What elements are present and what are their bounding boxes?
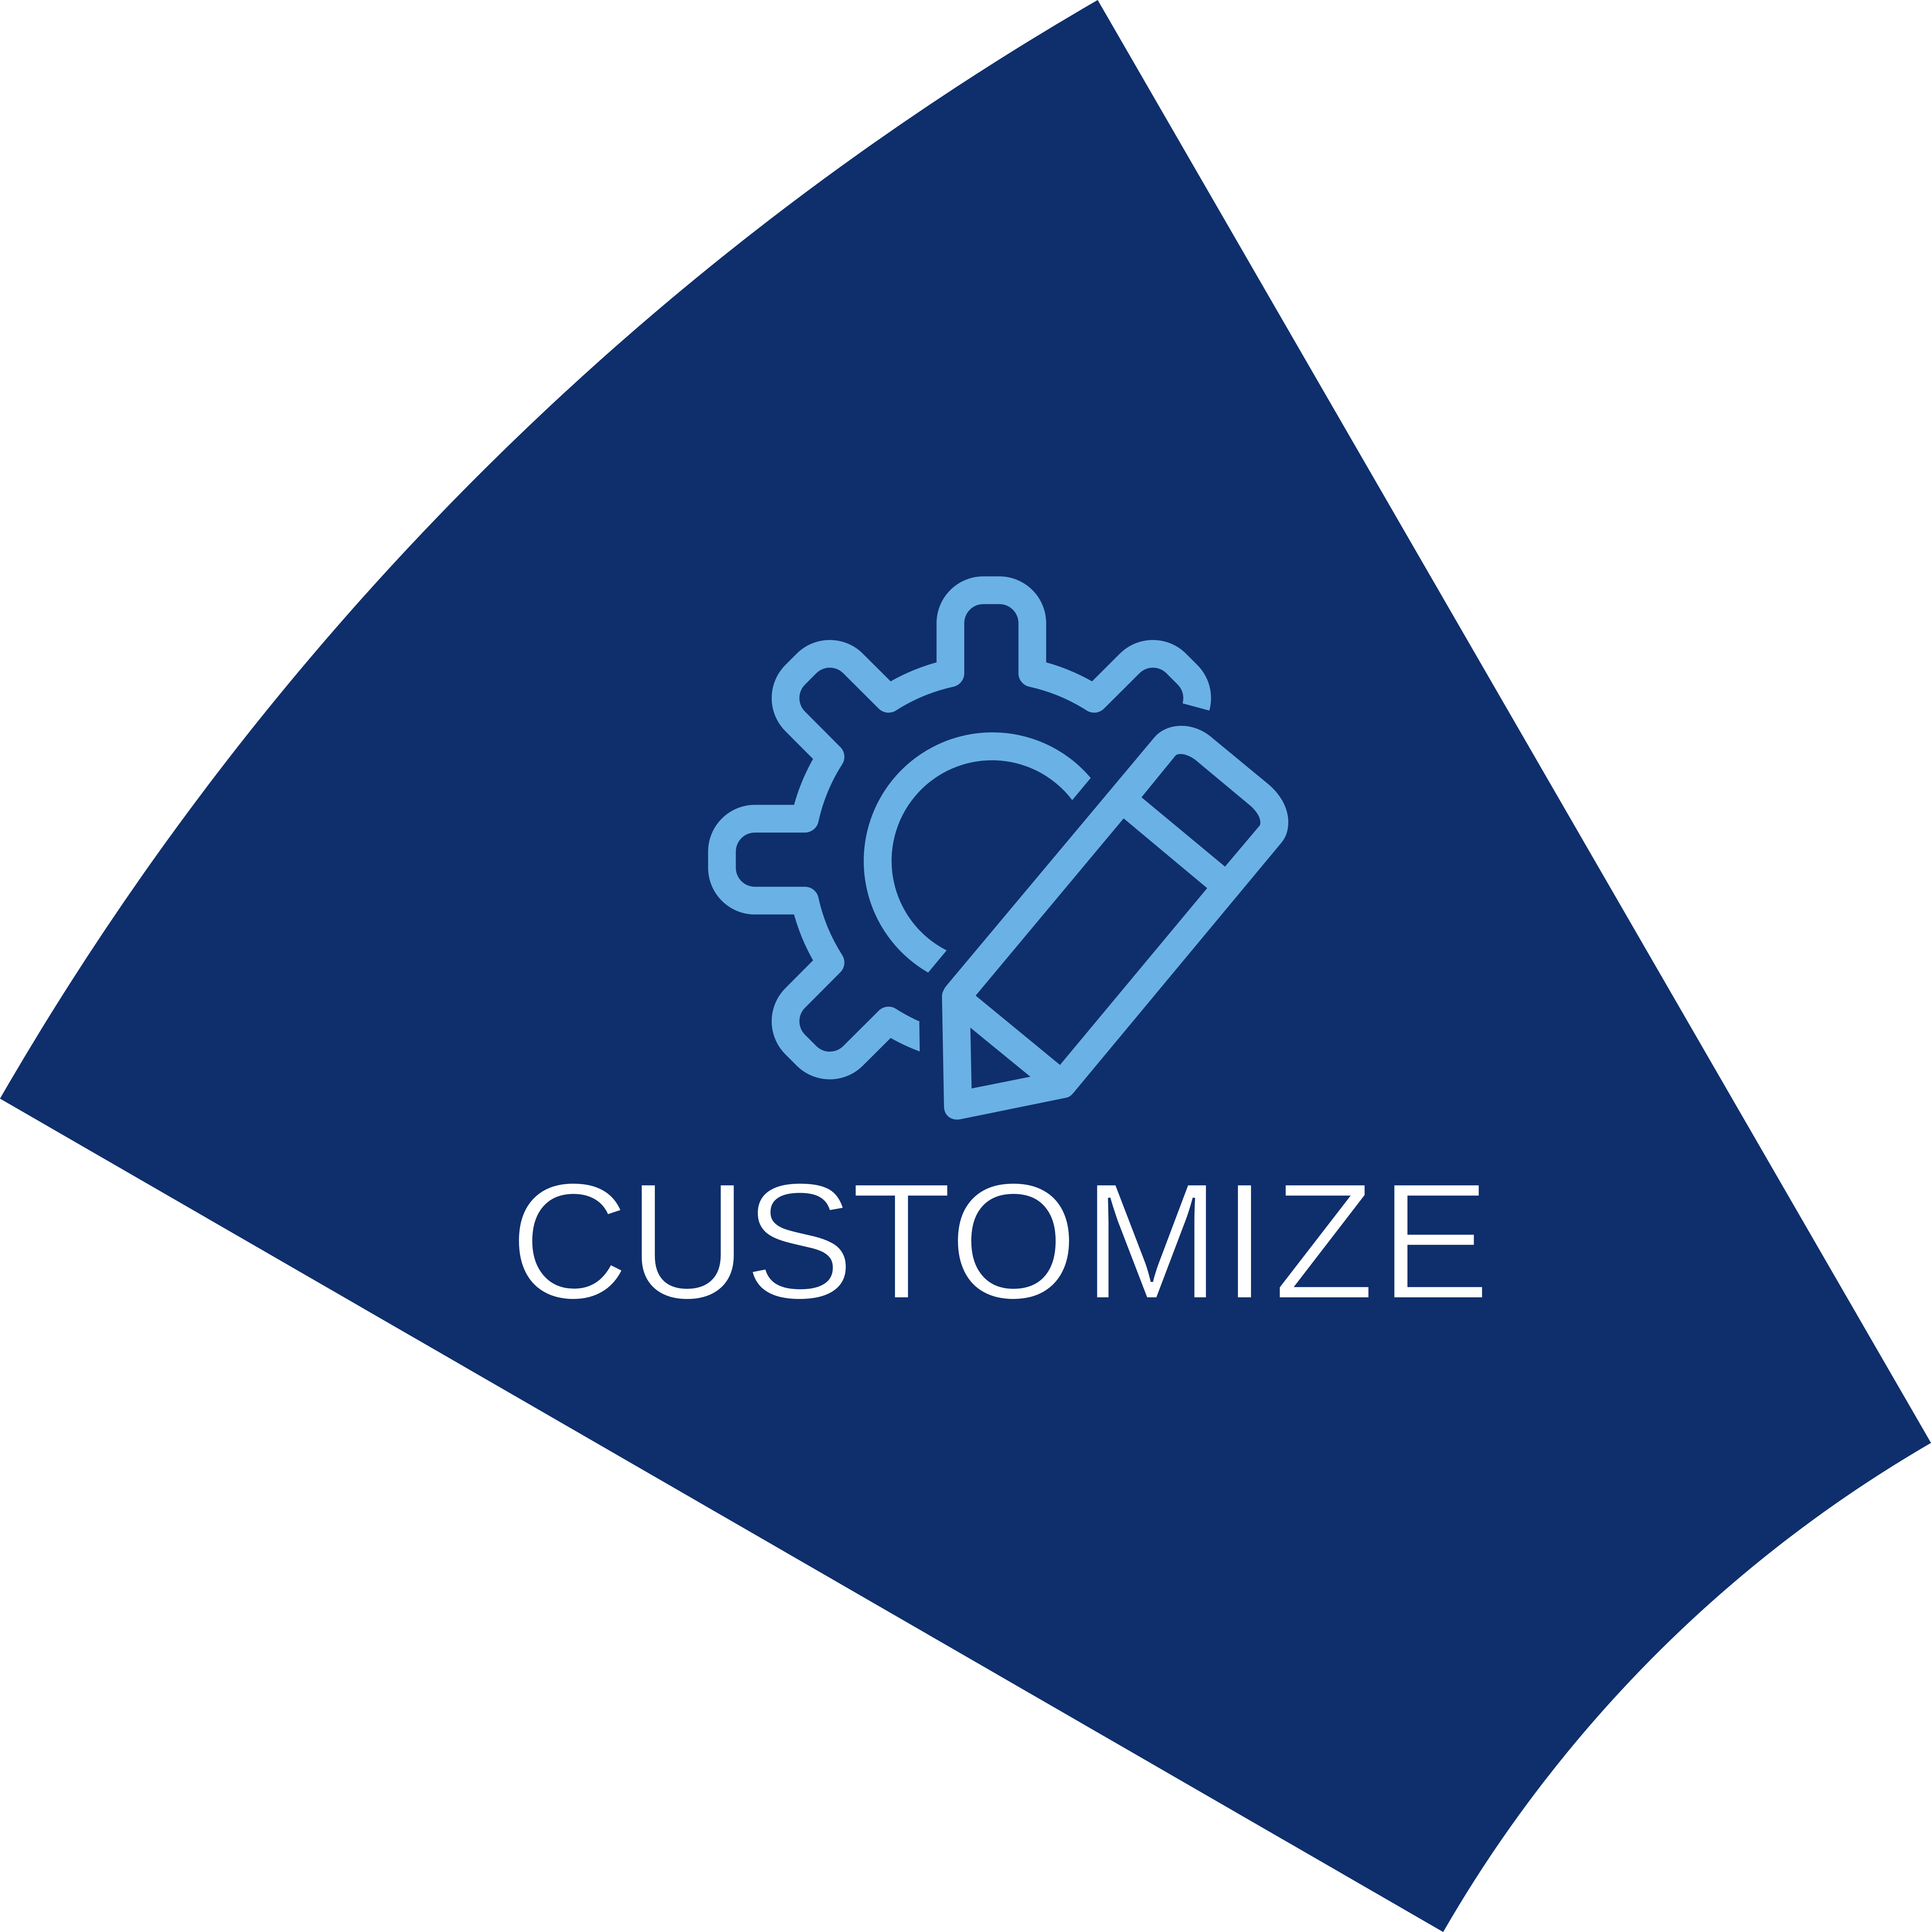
- icon part: gear outline: [722, 590, 1197, 1065]
- title: CUSTOMIZE: CUSTOMIZE: [509, 1148, 1490, 1334]
- icon: gear with pencil: [722, 590, 1288, 1120]
- icon part: pencil: [942, 726, 1288, 1120]
- icon part: gear inner circle arc: [864, 732, 1091, 972]
